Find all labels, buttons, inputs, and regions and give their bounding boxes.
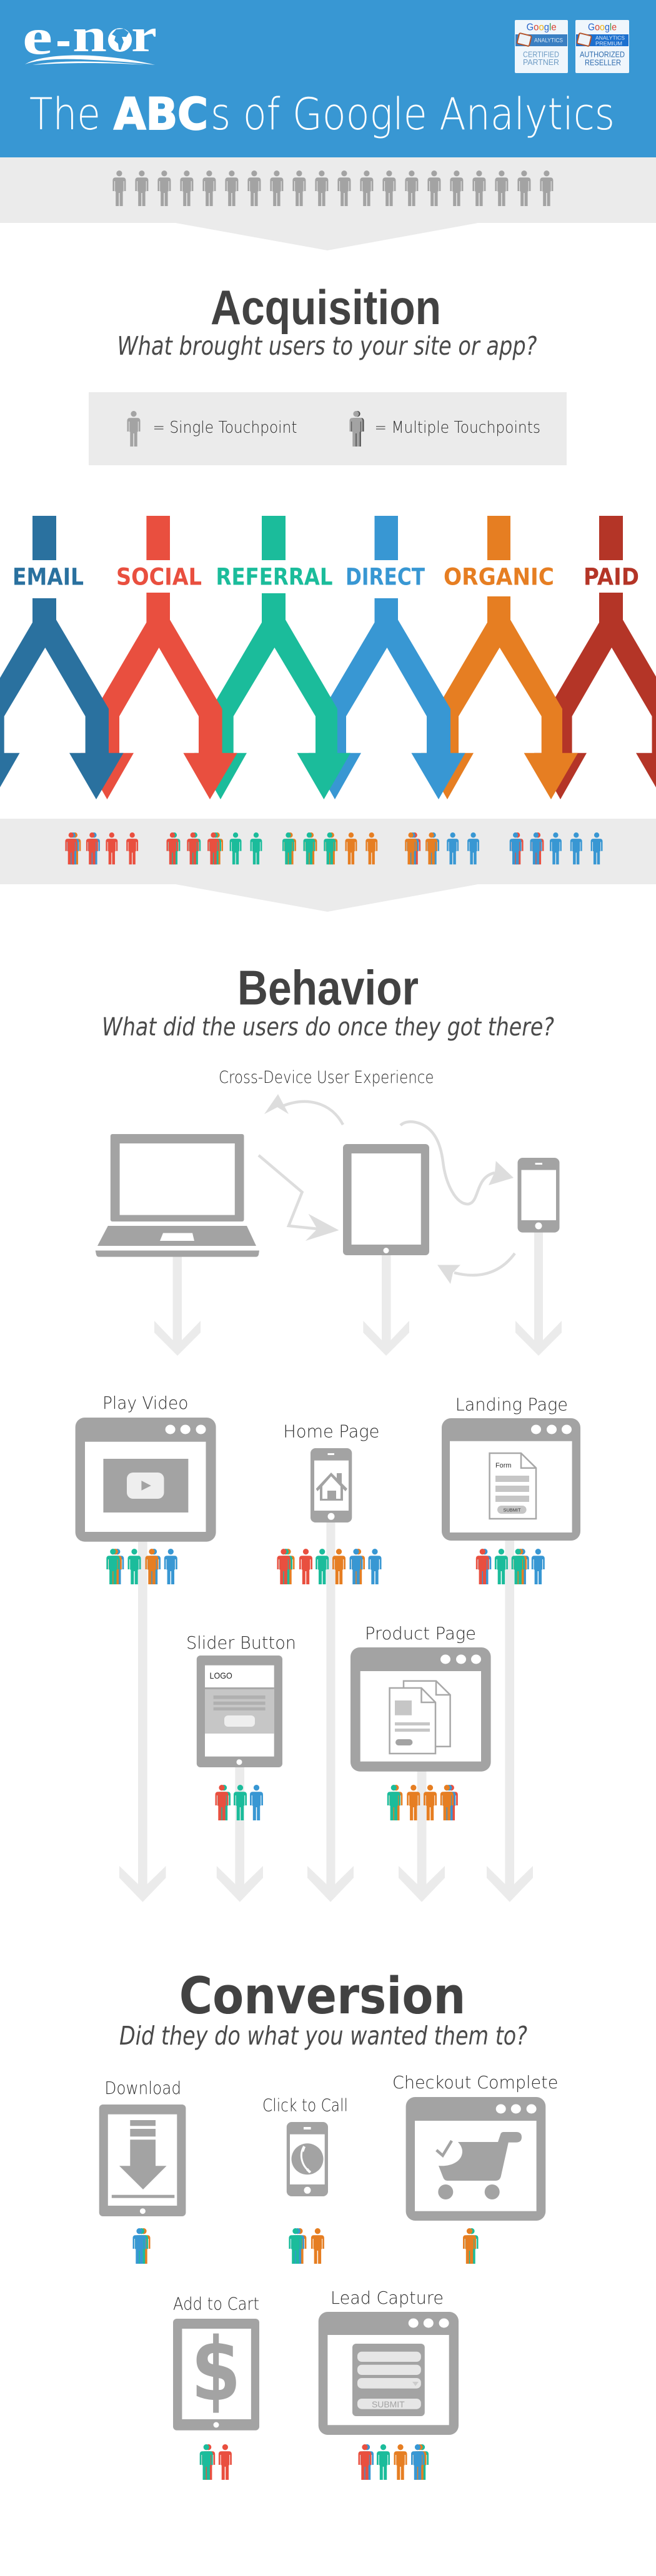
label: Home Page	[283, 1421, 379, 1442]
arrow: social	[81, 593, 237, 799]
lower grey band with coloured users	[0, 819, 656, 912]
icon: tablet	[343, 1144, 429, 1255]
label: Play Video	[102, 1393, 188, 1413]
behavior long arrows	[119, 1521, 533, 1902]
title	[29, 89, 615, 140]
item: Download	[99, 2078, 186, 2264]
badge: Google Analytics Premium Authorized Reseller: PREMIUM	[595, 40, 622, 46]
arrow: tablet to laptop	[264, 1094, 343, 1125]
arrow: direct	[309, 598, 465, 799]
browser with form: SUBMIT	[504, 1509, 521, 1513]
users	[106, 1549, 177, 1584]
channel labels: EMAIL	[12, 563, 84, 591]
users	[359, 2444, 429, 2480]
badge: Google Analytics Certified Partner: PARTNER	[523, 58, 559, 67]
item: Add to Cart	[173, 2294, 259, 2480]
browser with cart	[406, 2097, 545, 2221]
phone with call icon	[287, 2122, 328, 2196]
channel labels: DIRECT	[345, 563, 425, 591]
arrow: phone to tablet	[437, 1253, 515, 1284]
channel labels: REFERRAL	[216, 563, 332, 591]
browser with documents	[350, 1647, 491, 1772]
heading: Behavior: Behavior	[237, 960, 419, 1015]
item: Play Video	[76, 1393, 216, 1584]
users row	[112, 170, 553, 206]
badge: Google Analytics Certified Partner: Google	[527, 22, 557, 33]
browser with form: Form	[495, 1462, 511, 1469]
header banner	[0, 0, 656, 157]
icon: laptop	[96, 1134, 259, 1257]
arrow: laptop to tablet	[259, 1155, 339, 1241]
logo: e-nor: e	[22, 8, 52, 65]
top grey band with users	[0, 157, 656, 250]
users	[463, 2228, 479, 2264]
tablet with dollar sign: $	[191, 2319, 241, 2421]
label: Slider Button	[186, 1632, 296, 1653]
item: Product Page	[350, 1623, 491, 1820]
browser with lead form: SUBMIT	[372, 2399, 405, 2409]
arrow: referral	[194, 593, 350, 799]
users	[132, 2228, 150, 2264]
legend text: single touchpoint: = Single Touchpoint	[152, 418, 297, 437]
label: Lead Capture	[330, 2287, 444, 2308]
badge: Google Analytics Premium Authorized Reseller: Google	[588, 22, 617, 33]
logo: e-nor: r	[131, 9, 157, 62]
channel labels: PAID	[584, 563, 639, 591]
legend	[89, 392, 567, 465]
phone with house	[311, 1448, 352, 1522]
arrow: paid	[534, 593, 656, 799]
tablet with slider	[197, 1656, 282, 1767]
browser with video	[76, 1418, 216, 1542]
channel labels: SOCIAL	[116, 563, 202, 591]
item: Landing Page	[442, 1394, 580, 1584]
item: Click to Call	[262, 2095, 348, 2264]
label: Click to Call	[262, 2095, 348, 2116]
tablet with dollar sign	[173, 2319, 259, 2430]
heading: Conversion: Conversion	[179, 1967, 465, 2026]
channel labels: ORGANIC	[444, 563, 554, 591]
icon: multiple touchpoints	[350, 411, 364, 447]
logo: e-nor	[22, 8, 157, 65]
channel stubs	[32, 516, 623, 560]
arrow: tablet to phone	[400, 1122, 514, 1204]
legend text: multiple touchpoints: = Multiple Touchpoints	[375, 418, 540, 437]
subheading: acquisition question: What brought users to your site or app?	[117, 331, 537, 361]
label: Add to Cart	[173, 2294, 259, 2314]
arrow: email	[0, 598, 124, 799]
item: Lead Capture	[319, 2287, 459, 2480]
icon: phone	[517, 1158, 560, 1233]
users by channel	[65, 832, 602, 864]
users	[387, 1785, 458, 1820]
device down arrows	[154, 1230, 562, 1356]
browser with form	[442, 1418, 580, 1541]
badge: Google Analytics Premium Authorized Reseller: ANALYTICS	[595, 34, 625, 41]
subheading: behavior question: What did the users do once they got there?	[102, 1013, 554, 1042]
channel labels	[12, 563, 639, 591]
tablet with slider: LOGO	[210, 1670, 232, 1680]
badge: Google Analytics Certified Partner	[515, 20, 568, 73]
tablet with download arrow	[99, 2105, 186, 2216]
badge: Google Analytics Certified Partner: ANALYTICS	[534, 37, 563, 44]
badge: Google Analytics Premium Authorized Reseller: RESELLER	[585, 59, 621, 67]
label: Landing Page	[455, 1394, 568, 1415]
subheading: conversion question: Did they do what you wanted them to?	[119, 2021, 527, 2051]
badge: Google Analytics Premium Authorized Reseller: AUTHORIZED	[580, 51, 625, 59]
badge: Google Analytics Certified Partner: CERTIFIED	[523, 51, 559, 59]
title: ABC	[114, 89, 208, 140]
badge: Google Analytics Premium Authorized Reseller	[575, 20, 629, 73]
item: Checkout Complete	[392, 2072, 558, 2264]
label: cross-device: Cross-Device User Experience	[219, 1068, 434, 1087]
users	[215, 1785, 263, 1820]
arrow: organic	[421, 596, 578, 799]
browser with lead form	[319, 2312, 459, 2435]
users	[476, 1549, 545, 1584]
label: Product Page	[365, 1623, 476, 1644]
icon: single touchpoint	[127, 411, 140, 447]
forked channel arrows	[0, 593, 656, 799]
logo: e-nor: n	[72, 9, 107, 62]
title: The	[29, 89, 101, 140]
title: s of Google Analytics	[211, 89, 615, 140]
heading: Acquisition: Acquisition	[211, 280, 441, 335]
label: Download	[104, 2078, 181, 2098]
item: Home Page	[277, 1421, 381, 1584]
label: Checkout Complete	[392, 2072, 558, 2093]
users	[200, 2444, 232, 2480]
users	[277, 1549, 381, 1584]
item: Slider Button	[186, 1632, 296, 1820]
users	[289, 2228, 324, 2264]
